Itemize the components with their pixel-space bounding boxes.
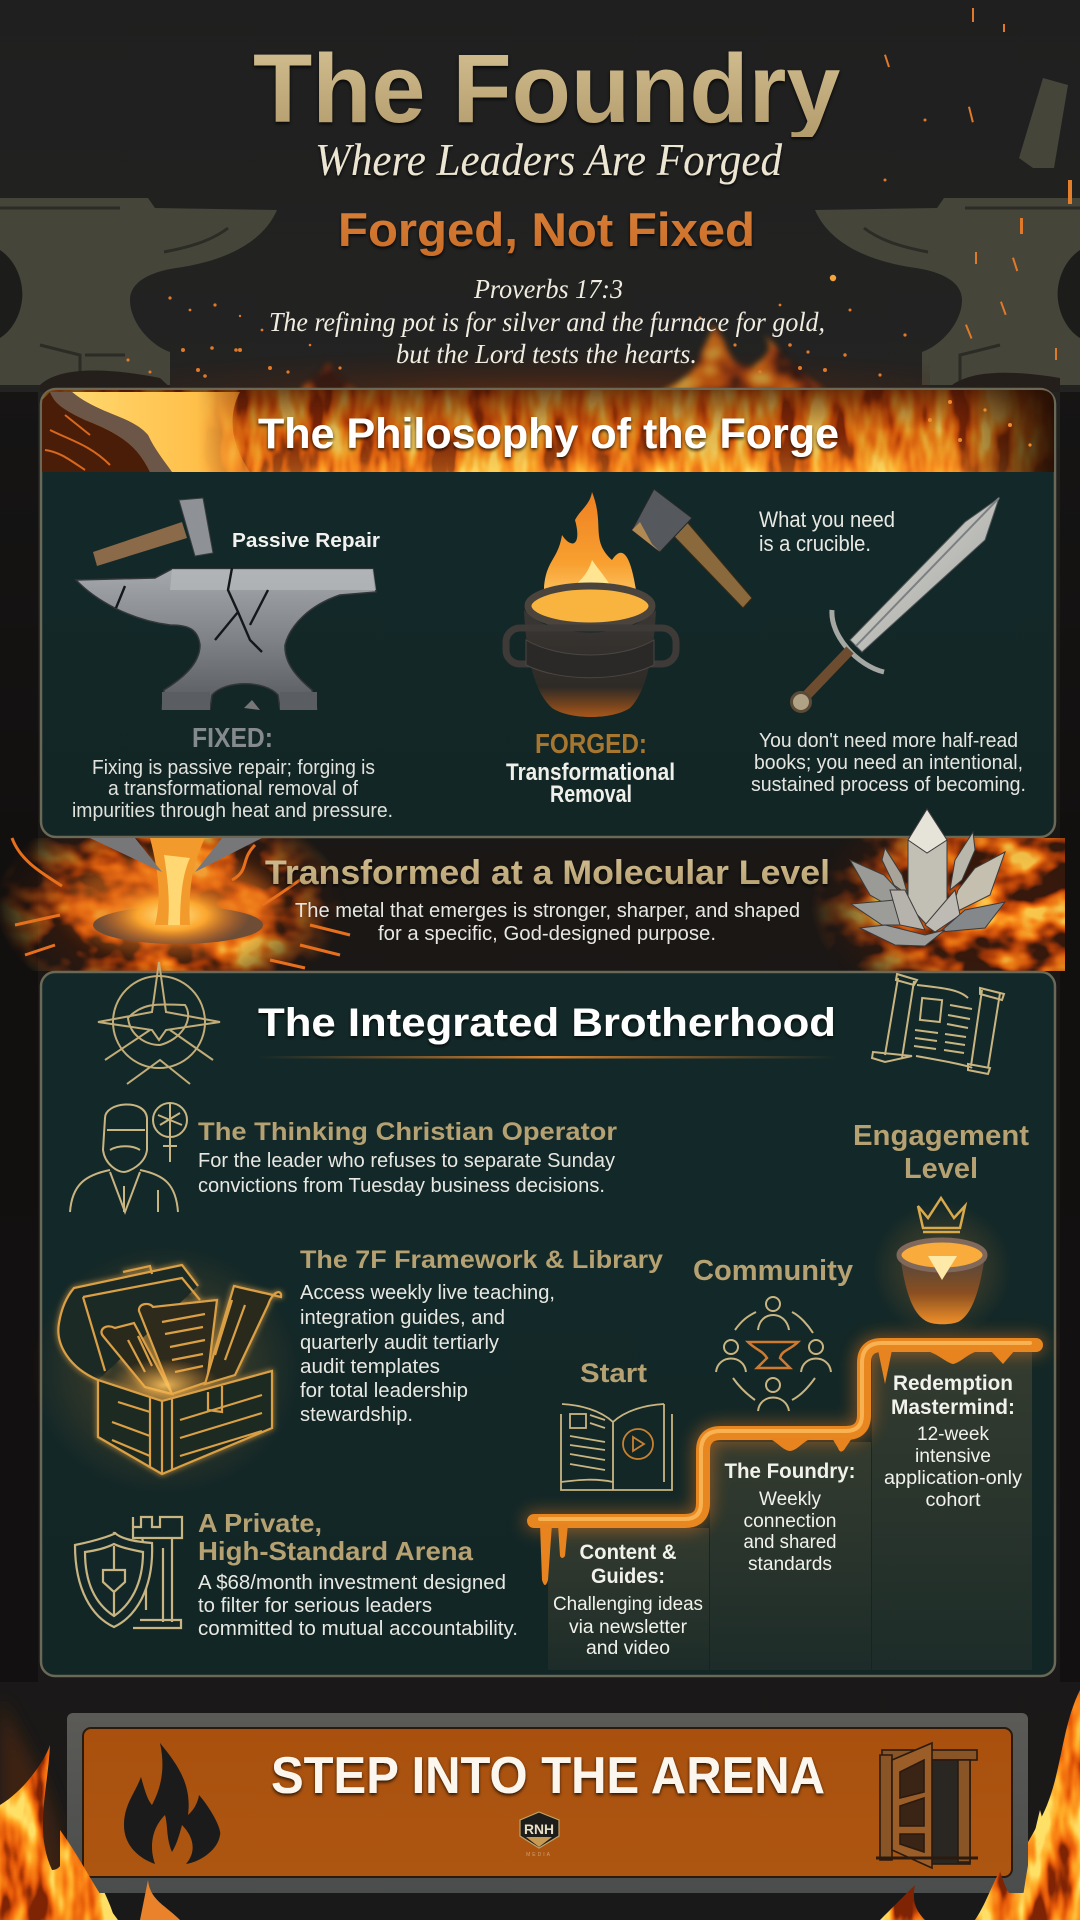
molten drips [540, 1350, 1015, 1585]
sword description: sustained process of becoming. [751, 774, 1026, 796]
step: redemption mastermind: application-only [884, 1468, 1023, 1489]
flame header strip [42, 390, 1054, 472]
fixed description: impurities through heat and pressure. [72, 800, 393, 822]
step: the foundry: and shared [744, 1532, 836, 1553]
step: redemption mastermind: intensive [915, 1446, 991, 1467]
engagement level label: Level [904, 1153, 978, 1185]
description: stewardship. [300, 1404, 413, 1426]
heading: The Thinking Christian Operator [198, 1118, 617, 1146]
band body text: The metal that emerges is stronger, sharper, and shaped [295, 900, 800, 922]
chart: engagement staircase [534, 1120, 1036, 1670]
icon: hammer over anvil [93, 498, 213, 566]
step: content and guides: Guides: [591, 1565, 665, 1588]
step: redemption mastermind: Redemption [893, 1372, 1013, 1395]
subtitle: Where Leaders Are Forged [315, 135, 782, 185]
forged description: Transformational [506, 759, 675, 786]
icon: sword [792, 498, 999, 712]
band body text: for a specific, God-designed purpose. [378, 923, 716, 945]
icon: handshake star [98, 962, 220, 1084]
block: private high-standard arena [75, 1508, 518, 1640]
engagement level label [853, 1120, 1029, 1185]
foreground flames [0, 1810, 1080, 1920]
fixed description: Fixing is passive repair; forging is [92, 757, 375, 779]
step columns [548, 1352, 1032, 1670]
heading: STEP INTO THE ARENA [271, 1747, 825, 1805]
panel background [41, 389, 1055, 837]
scripture quote: The refining pot is for silver and the furnace for gold, [269, 307, 825, 337]
icon: logo shield: RNH [524, 1821, 554, 1837]
crucible statement [759, 507, 895, 556]
description: quarterly audit tertiarly [300, 1332, 499, 1354]
molten fire left [0, 838, 350, 971]
description: Access weekly live teaching, [300, 1282, 555, 1304]
icon: open book [561, 1404, 672, 1490]
icon: treasure chest of scrolls [30, 1245, 300, 1495]
panel: molecular band [0, 809, 1065, 971]
tagline: Forged, Not Fixed [338, 203, 755, 256]
sparks [126, 8, 1072, 378]
description: committed to mutual accountability. [198, 1618, 518, 1640]
description: audit templates [300, 1356, 440, 1378]
icon: crowned crucible [872, 1198, 1012, 1338]
orange plate [83, 1728, 1012, 1877]
scripture quote: but the Lord tests the hearts. [396, 339, 697, 369]
description: to filter for serious leaders [198, 1595, 432, 1617]
sword description [751, 730, 1026, 796]
step: content and guides [553, 1541, 703, 1659]
step: the foundry: standards [748, 1554, 832, 1575]
molten fire right [810, 838, 1065, 971]
icon: open door [876, 1743, 978, 1868]
icon: logo shield [520, 1812, 559, 1858]
crucible statement: is a crucible. [759, 531, 871, 556]
molten stair line [534, 1343, 1036, 1521]
step: content and guides: Content & [580, 1541, 676, 1564]
title: The Foundry [253, 34, 840, 143]
band heading: Transformed at a Molecular Level [265, 854, 830, 892]
community label: Community [693, 1255, 853, 1287]
description: convictions from Tuesday business decisions. [198, 1175, 605, 1197]
sword description: books; you need an intentional, [754, 752, 1023, 774]
panel: philosophy of the forge [41, 389, 1055, 837]
forged heading: FORGED: [535, 728, 647, 759]
fixed heading: FIXED: [192, 722, 273, 753]
description [198, 1150, 615, 1197]
panel background [41, 972, 1055, 1676]
description: for total leadership [300, 1380, 468, 1402]
icon: cracked anvil [76, 568, 376, 710]
icon: crucible with flame and hammer [506, 489, 752, 717]
crucible statement: What you need [759, 507, 895, 532]
heading: High-Standard Arena [198, 1536, 474, 1566]
description [300, 1282, 555, 1426]
forged description: Removal [550, 781, 632, 808]
icon: community around anvil [716, 1297, 831, 1411]
call to action banner [67, 1713, 1028, 1893]
forged description [506, 759, 675, 808]
icon: logo shield: MEDIA [526, 1852, 552, 1858]
step: redemption mastermind: cohort [926, 1490, 981, 1511]
heading: A Private, [198, 1508, 322, 1538]
step: the foundry: The Foundry: [724, 1460, 856, 1483]
engagement level label: Engagement [853, 1120, 1029, 1152]
right background anvil [815, 198, 1080, 392]
block: thinking christian operator [70, 1103, 617, 1212]
heading: The 7F Framework & Library [300, 1246, 663, 1274]
description: For the leader who refuses to separate Sunday [198, 1150, 615, 1172]
panel heading: The Philosophy of the Forge [258, 410, 839, 458]
flames above first panel [300, 318, 830, 392]
right background hammer [1019, 78, 1068, 168]
step: redemption mastermind: Mastermind: [891, 1396, 1015, 1419]
icon: black flame [124, 1743, 220, 1864]
step: the foundry: connection [744, 1511, 836, 1532]
fixed description: a transformational removal of [108, 778, 358, 800]
description: A $68/month investment designed [198, 1572, 506, 1594]
icon: shield and tower [75, 1517, 182, 1628]
band body text [295, 900, 800, 945]
step: content and guides: via newsletter [569, 1617, 688, 1638]
icon: crystal cluster [850, 809, 1005, 946]
left background anvil [0, 198, 277, 392]
scripture quote [269, 274, 825, 369]
stone frame [67, 1713, 1028, 1893]
icon: leader with brain and cross [70, 1103, 187, 1212]
fixed description [72, 757, 393, 822]
description: integration guides, and [300, 1307, 505, 1329]
scripture quote: Proverbs 17:3 [473, 274, 623, 304]
step: content and guides: Challenging ideas [553, 1594, 703, 1615]
icon: scroll [872, 974, 1004, 1074]
heading: The Integrated Brotherhood [258, 1001, 836, 1045]
flames behind call to action [0, 1690, 1080, 1920]
block: 7F framework and library [30, 1245, 663, 1495]
step: redemption mastermind: 12-week [917, 1424, 989, 1445]
heading rule [258, 1056, 836, 1058]
step: redemption mastermind [884, 1372, 1023, 1511]
sword description: You don't need more half-read [759, 730, 1018, 752]
step: the foundry [724, 1460, 856, 1575]
ember glow above first panel [170, 330, 930, 392]
description [198, 1572, 518, 1640]
dark side margins [0, 392, 1080, 1682]
label: passive repair: Passive Repair [232, 530, 380, 552]
step: the foundry: Weekly [759, 1489, 821, 1510]
start label: Start [580, 1358, 647, 1388]
heading [198, 1508, 474, 1566]
panel: integrated brotherhood [30, 962, 1055, 1676]
step: content and guides: and video [586, 1638, 670, 1659]
